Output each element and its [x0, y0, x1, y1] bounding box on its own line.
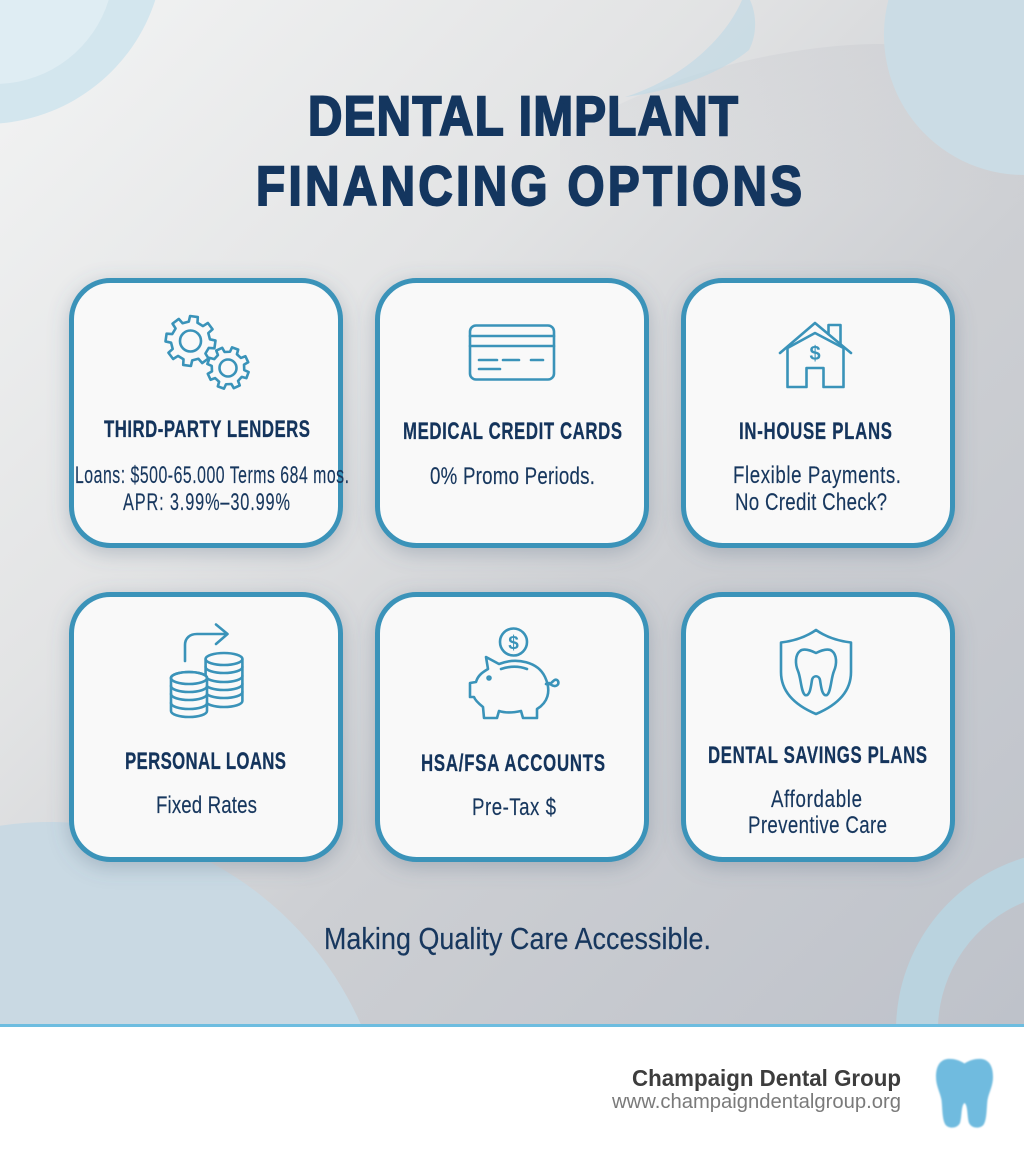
panel: medical credit cards: [378, 280, 646, 546]
heading: HSA/FSA ACCOUNTS: [421, 750, 605, 777]
text block: Flexible Payments.: [733, 462, 901, 489]
icon: credit card: [470, 326, 554, 380]
text block: Fixed Rates: [156, 792, 257, 819]
text block: Pre-Tax $: [472, 794, 556, 821]
text block: [748, 786, 887, 839]
text block: 0% Promo Periods.: [430, 463, 595, 490]
text block: [733, 462, 901, 516]
title: [256, 85, 802, 218]
icon: house with dollar: [780, 323, 851, 387]
text block: Loans: $500-65.000 Terms 684 mos.: [75, 463, 349, 489]
text block: Affordable: [771, 786, 862, 813]
panel: dental savings plans: [684, 594, 952, 860]
heading: THIRD-PARTY LENDERS: [104, 416, 310, 443]
heading: IN-HOUSE PLANS: [739, 418, 892, 445]
text block: APR: 3.99%–30.99%: [123, 489, 290, 516]
icon: gears: [163, 313, 255, 395]
panel: in-house plans: [684, 280, 952, 546]
panel: hsa/fsa accounts: [378, 594, 646, 860]
icon: piggy bank: $: [508, 633, 519, 654]
icon: footer tooth: [936, 1059, 993, 1128]
title: FINANCING OPTIONS: [256, 155, 802, 218]
footer url: www.champaigndentalgroup.org: [611, 1090, 901, 1113]
heading: DENTAL SAVINGS PLANS: [708, 742, 927, 769]
heading: MEDICAL CREDIT CARDS: [403, 418, 622, 445]
icon: coins and arrow: [171, 624, 242, 717]
heading: PERSONAL LOANS: [125, 748, 286, 775]
title: DENTAL IMPLANT: [308, 85, 738, 148]
panel: personal loans: [72, 594, 340, 860]
text block: [75, 463, 349, 516]
text block: No Credit Check?: [735, 489, 887, 516]
text block: Preventive Care: [748, 812, 887, 839]
icon: shield with tooth: [781, 630, 851, 714]
icon: house with dollar: $: [809, 343, 821, 365]
tagline: Making Quality Care Accessible.: [324, 922, 711, 956]
footer band: [0, 1024, 1024, 1154]
footer brand name: Champaign Dental Group: [632, 1065, 901, 1091]
icon: piggy bank: [470, 628, 558, 718]
panel: third-party lenders: [72, 280, 349, 546]
